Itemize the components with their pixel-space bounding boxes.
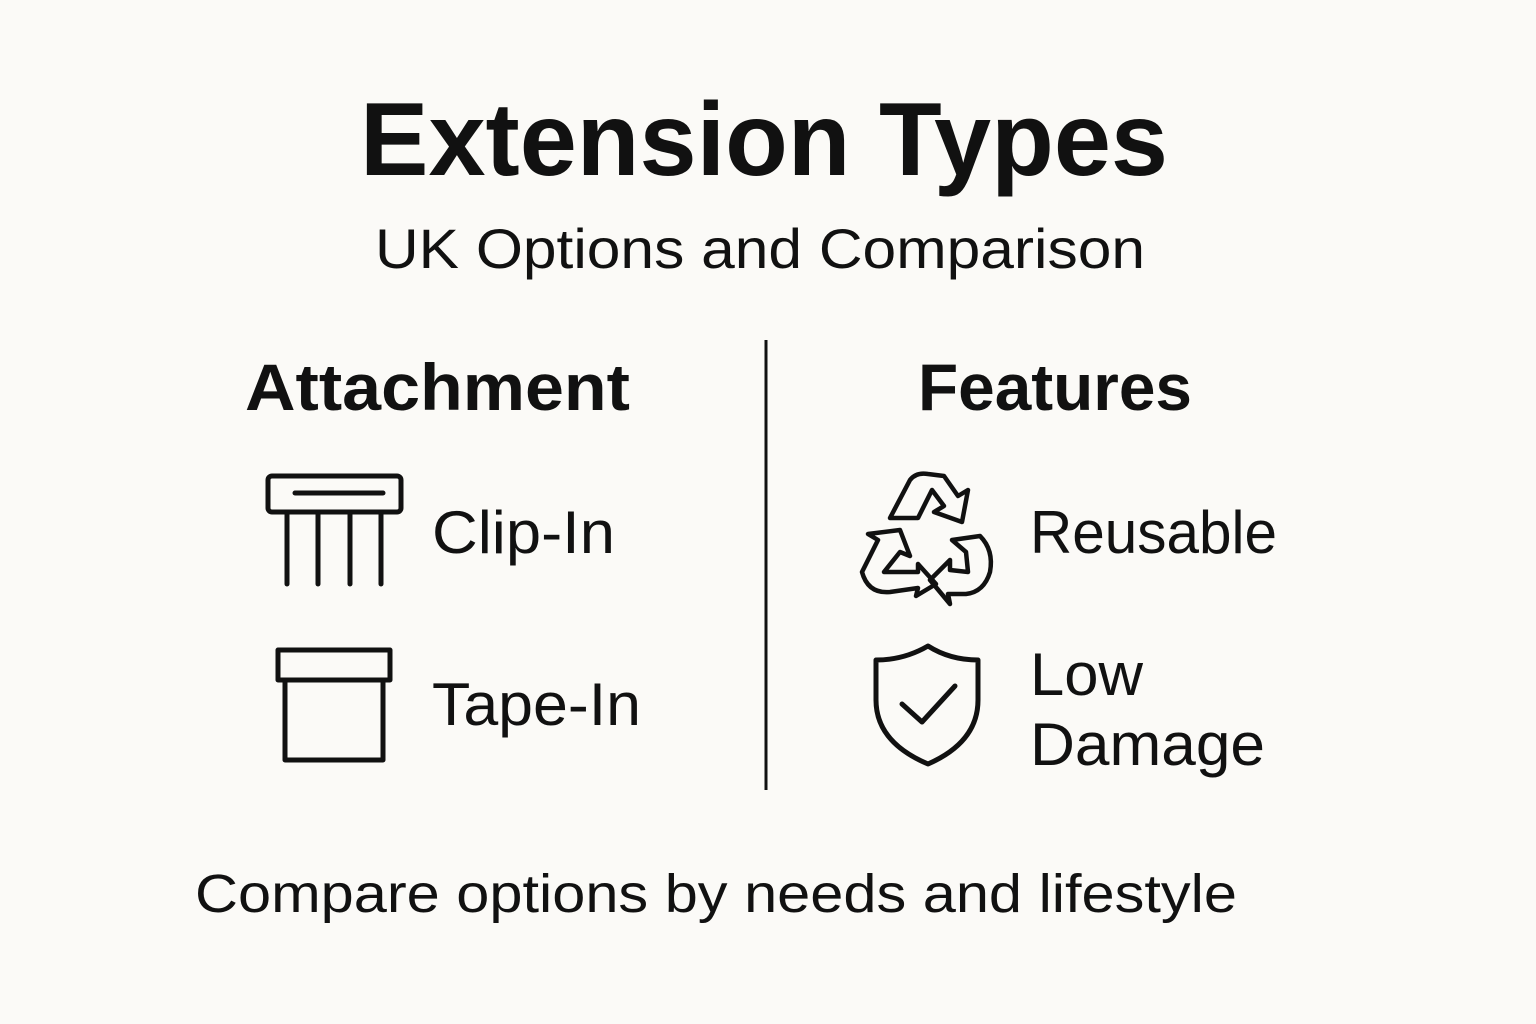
label: tape-in: Tape-In [432,671,641,738]
icon: shield [876,646,978,764]
heading: features: Features [918,350,1192,424]
icon: clip-in [268,476,401,584]
footer text: Compare options by needs and lifestyle [195,864,1237,924]
heading: attachment: Attachment [245,350,630,424]
label: reusable: Reusable [1030,499,1277,566]
label: low damage [1030,641,1265,778]
label: clip-in: Clip-In [432,499,615,566]
icon: recycle [862,474,991,604]
label: low damage: Damage [1030,711,1265,778]
divider line [764,340,768,790]
icon: tape-in [278,650,390,760]
subtitle: UK Options and Comparison [375,217,1145,280]
label: low damage: Low [1030,641,1144,708]
title: Extension Types [360,82,1168,198]
